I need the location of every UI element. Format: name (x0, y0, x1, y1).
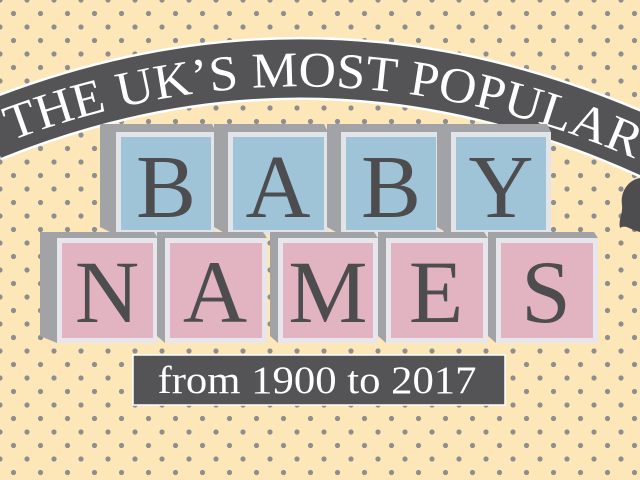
blocks: BABY: Y (468, 138, 534, 237)
blocks: NAMES: A (183, 244, 247, 342)
subtitle text: from 1900 to 2017 (158, 359, 476, 402)
blocks: NAMES: S (521, 244, 571, 342)
blocks: NAMES: E (409, 244, 463, 342)
subtitle box (133, 355, 505, 405)
blocks: NAMES (40, 232, 598, 343)
blocks: BABY (100, 124, 551, 237)
title banner (0, 36, 640, 178)
blocks: NAMES: N (75, 244, 139, 342)
blocks: NAMES: M (288, 244, 368, 342)
title text: THE UK’S MOST POPULAR (1, 54, 639, 158)
blocks: BABY: A (246, 138, 310, 237)
blocks: BABY: B (136, 138, 196, 237)
blocks: BABY: B (361, 138, 421, 237)
icon: baby hair (620, 178, 640, 232)
